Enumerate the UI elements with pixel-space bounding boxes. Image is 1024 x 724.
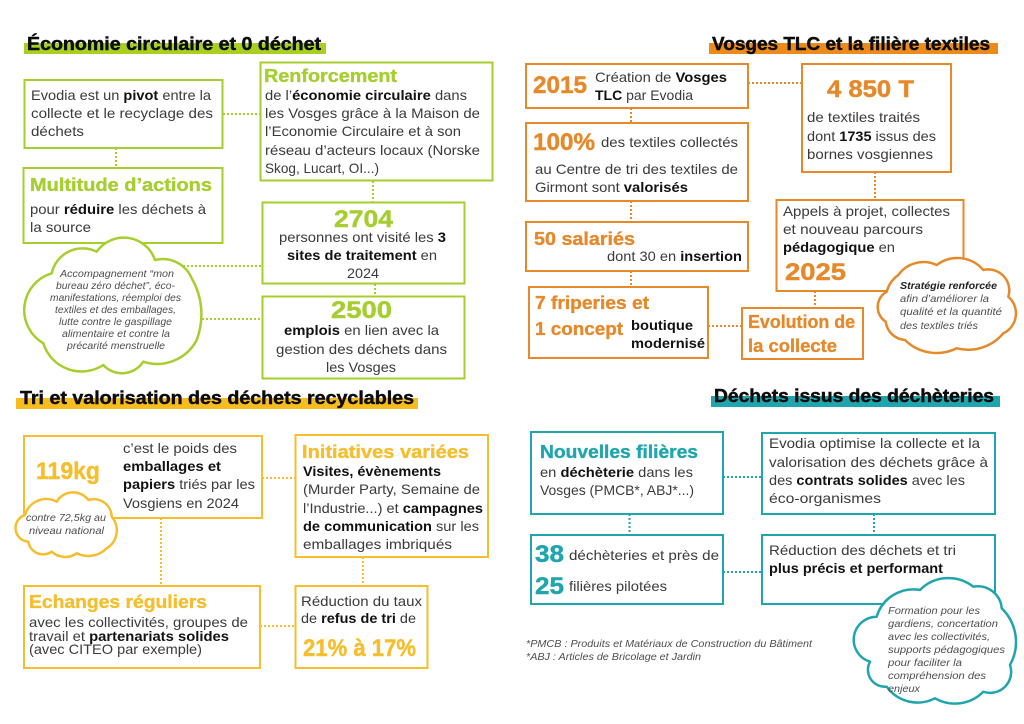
box: evolution de la collecte	[742, 308, 863, 359]
box: 38 déchèteries: déchèteries et près de	[569, 547, 719, 563]
cloud: formation	[854, 578, 1016, 704]
box: friperies: 1 concept	[535, 319, 623, 339]
cloud: formation: pour faciliter la	[887, 657, 962, 669]
box: initiatives variées	[296, 435, 488, 557]
box: réduction des déchets: plus précis et performant	[769, 560, 943, 576]
box: echanges réguliers: travail et partenariats solides	[29, 628, 229, 644]
box: 38 déchèteries: 38	[535, 541, 564, 568]
panel: tri et valorisation	[16, 388, 488, 668]
panel: économie circulaire	[24, 33, 492, 378]
box: evodia contrats	[762, 433, 995, 514]
cloud: contre 72,5kg	[16, 492, 117, 557]
box: pivot: collecte et le recyclage des	[31, 105, 213, 121]
box: echanges réguliers: Echanges réguliers	[29, 592, 207, 612]
box: renforcement: de l’économie circulaire dans	[265, 87, 467, 103]
box: réduction des déchets	[762, 535, 995, 604]
box: evolution de la collecte: Evolution de	[748, 312, 855, 332]
cloud: accompagnement: lutte contre le gaspillage	[59, 316, 172, 328]
box: 119kg: 119kg	[36, 458, 100, 485]
box: 2500 emplois: les Vosges	[326, 359, 396, 375]
box: evodia contrats: éco-organismes	[769, 490, 881, 506]
box: 4 850 T: bornes vosgiennes	[807, 146, 933, 162]
box: nouvelles filières: Vosges (PMCB*, ABJ*...)	[540, 482, 694, 498]
box: renforcement: Renforcement	[264, 66, 397, 86]
connector: pivot to renforcement	[223, 113, 260, 115]
heading: Vosges TLC: Vosges TLC et la filière textiles	[712, 34, 990, 54]
box: 2500 emplois: gestion des déchets dans	[276, 341, 447, 357]
box: 100%	[526, 123, 748, 201]
box: evodia contrats: valorisation des déchets grâce à	[769, 454, 988, 470]
box: réduction des déchets: Réduction des déchets et tri	[769, 542, 956, 558]
connector: evodia to réduction	[873, 514, 875, 535]
box: 4 850 T: de textiles traités	[807, 109, 920, 125]
cloud: formation: avec les collectivités,	[888, 631, 990, 643]
box: echanges réguliers	[24, 586, 260, 668]
box: 38 déchèteries: filières pilotées	[569, 578, 667, 594]
cloud: accompagnement	[24, 238, 201, 373]
box: renforcement	[260, 62, 492, 180]
box: friperies: 7 friperies et	[535, 293, 649, 313]
box: 119kg: papiers triés par les	[123, 476, 255, 492]
cloud: formation: Formation pour les	[888, 605, 981, 617]
box: 2704 visiteurs: personnes ont visité les 3	[279, 229, 446, 245]
footnotes: *ABJ : Articles de Bricolage et Jardin	[526, 651, 701, 663]
cloud: stratégie renforcée: des textiles triés	[900, 320, 979, 332]
cloud: stratégie renforcée: qualité et la quantité	[900, 306, 1002, 318]
connector: initiatives to réduction	[362, 557, 364, 586]
cloud: accompagnement: Accompagnement “mon	[59, 268, 174, 280]
box: 2704 visiteurs: 2024	[347, 265, 379, 281]
box: 100%: 100%	[533, 129, 595, 156]
cloud: formation: gardiens, concertation	[888, 618, 998, 630]
box: appels à projet: pédagogique en	[783, 239, 895, 255]
box: initiatives variées: (Murder Party, Semaine de	[303, 481, 480, 497]
footnotes: *PMCB : Produits et Matériaux de Construction du Bâtiment	[526, 638, 813, 650]
cloud: stratégie renforcée: afin d’améliorer la	[900, 293, 989, 305]
box: nouvelles filières: en déchèterie dans les	[540, 464, 693, 480]
connector: 2015 to 4850 T	[748, 82, 801, 84]
box: friperies	[529, 287, 708, 358]
box: initiatives variées: emballages imbriqués	[303, 536, 452, 552]
connector: echanges to réduction	[260, 625, 295, 627]
cloud: contre 72,5kg: niveau national	[29, 525, 105, 537]
connector: 38 to réduction	[723, 571, 762, 573]
connector: 4850 T to appels	[874, 172, 876, 200]
cloud: accompagnement: textiles et des emballages,	[55, 304, 176, 316]
cloud: stratégie renforcée	[878, 258, 1016, 353]
box: evodia contrats: Evodia optimise la collecte et la	[769, 435, 980, 451]
box: 100%: des textiles collectés	[601, 134, 738, 150]
box: 50 salariés: 50 salariés	[534, 229, 635, 249]
box: echanges réguliers: (avec CITEO par exemple)	[29, 641, 202, 657]
box: evodia contrats: des contrats solides avec les	[769, 472, 965, 488]
box: 2015	[526, 64, 748, 108]
box: 2500 emplois: 2500	[331, 297, 392, 324]
box: réduction refus de tri: de refus de tri de	[301, 610, 416, 626]
cloud: formation: enjeux	[888, 683, 921, 695]
box: pivot: Evodia est un pivot entre la	[31, 87, 211, 103]
box: 2500 emplois	[262, 296, 464, 378]
cloud: accompagnement: précarité menstruelle	[66, 340, 165, 352]
box: 2704 visiteurs: 2704	[334, 206, 393, 233]
heading: déchèteries: Déchets issus des déchèteries	[714, 386, 994, 406]
connector: nouvelles filières to evodia	[723, 476, 762, 478]
connector: 2015 to 100%	[630, 108, 632, 123]
heading: économie circulaire: Économie circulaire et 0 déchet	[27, 33, 321, 54]
footnotes	[526, 638, 813, 663]
box: renforcement: réseau d’acteurs locaux (Norske	[265, 142, 480, 158]
box: evolution de la collecte: la collecte	[748, 336, 837, 356]
box: appels à projet	[776, 200, 964, 291]
connector: 119kg to initiatives	[262, 477, 295, 479]
connector: nouvelles filières to 38	[628, 514, 630, 535]
box: nouvelles filières: Nouvelles filières	[540, 442, 698, 462]
box: 4 850 T: 4 850 T	[827, 76, 914, 103]
cloud: stratégie renforcée: Stratégie renforcée	[900, 280, 997, 292]
connector: renforcement to 2704	[372, 181, 374, 202]
connector: 50 salariés to friperies	[630, 271, 632, 287]
connector: cloud to 2500	[198, 318, 262, 320]
box: renforcement: Skog, Lucart, OI...)	[265, 160, 379, 176]
box: 2015: 2015	[533, 72, 587, 99]
box: renforcement: l’Economie Circulaire et à son	[265, 123, 461, 139]
box: 2704 visiteurs: sites de traitement en	[287, 247, 437, 263]
box: 4 850 T	[802, 64, 951, 172]
box: renforcement: les Vosges grâce à la Maison de	[265, 105, 480, 121]
box: pivot	[24, 80, 222, 148]
box: 38 déchèteries: 25	[535, 573, 564, 600]
heading: tri et valorisation: Tri et valorisation des déchets recyclables	[20, 388, 414, 408]
box: 2015: TLC par Evodia	[595, 87, 693, 103]
connector: pivot to multitude	[115, 148, 117, 168]
cloud: formation: supports pédagogiques	[888, 644, 1006, 656]
box: 119kg: Vosgiens en 2024	[123, 495, 239, 511]
cloud: contre 72,5kg: contre 72,5kg au	[26, 512, 106, 524]
box: 2500 emplois: emplois en lien avec la	[284, 322, 439, 338]
box: appels à projet: et nouveau parcours	[783, 221, 923, 237]
box: initiatives variées: Visites, évènements	[303, 463, 441, 479]
cloud: accompagnement: alimentaire et contre la	[62, 328, 170, 340]
cloud: formation: compréhension des	[888, 670, 987, 682]
box: friperies: modernisé	[631, 335, 705, 351]
box: appels à projet: 2025	[785, 259, 846, 286]
box: multitude d'actions: la source	[30, 219, 91, 235]
box: 38 déchèteries	[531, 535, 723, 604]
box: 100%: au Centre de tri des textiles de	[535, 161, 738, 177]
box: 4 850 T: dont 1735 issus des	[807, 128, 936, 144]
box: initiatives variées: Initiatives variées	[302, 442, 469, 462]
connector: friperies to evolution	[708, 325, 742, 327]
panel: Vosges TLC	[526, 34, 1016, 359]
box: 119kg: c’est le poids des	[123, 440, 237, 456]
box: initiatives variées: l’Industrie...) et campagnes	[303, 500, 483, 516]
box: 50 salariés	[526, 222, 748, 271]
connector: 119kg to echanges	[160, 518, 162, 586]
box: multitude d'actions	[24, 168, 222, 243]
box: réduction refus de tri: 21% à 17%	[303, 635, 416, 662]
box: réduction refus de tri	[296, 586, 428, 668]
box: 100%: Girmont sont valorisés	[535, 179, 688, 195]
box: multitude d'actions: pour réduire les déchets à	[30, 201, 206, 217]
box: 119kg	[24, 436, 262, 518]
cloud: accompagnement: manifestations, réemploi des	[50, 292, 182, 304]
box: multitude d'actions: Multitude d’actions	[30, 175, 212, 195]
box: echanges réguliers: avec les collectivités, groupes de	[29, 614, 248, 630]
box: pivot: déchets	[31, 123, 84, 139]
connector: 100% to 50 salariés	[630, 201, 632, 222]
box: 119kg: emballages et	[123, 458, 221, 474]
box: 50 salariés: dont 30 en insertion	[607, 248, 742, 264]
connector: 2704 to 2500	[374, 284, 376, 296]
cloud: accompagnement: bureau zéro déchet”, éco-	[56, 280, 175, 292]
panel: déchèteries	[526, 386, 1016, 704]
box: réduction refus de tri: Réduction du taux	[301, 593, 422, 609]
box: appels à projet: Appels à projet, collectes	[783, 203, 950, 219]
connector: appels to evolution	[814, 291, 816, 308]
box: friperies: boutique	[631, 317, 693, 333]
box: 2704 visiteurs	[262, 202, 464, 284]
connector: cloud to 2704	[183, 265, 262, 267]
box: 2015: Création de Vosges	[595, 69, 727, 85]
box: initiatives variées: de communication sur les	[303, 518, 479, 534]
box: nouvelles filières	[531, 432, 723, 514]
